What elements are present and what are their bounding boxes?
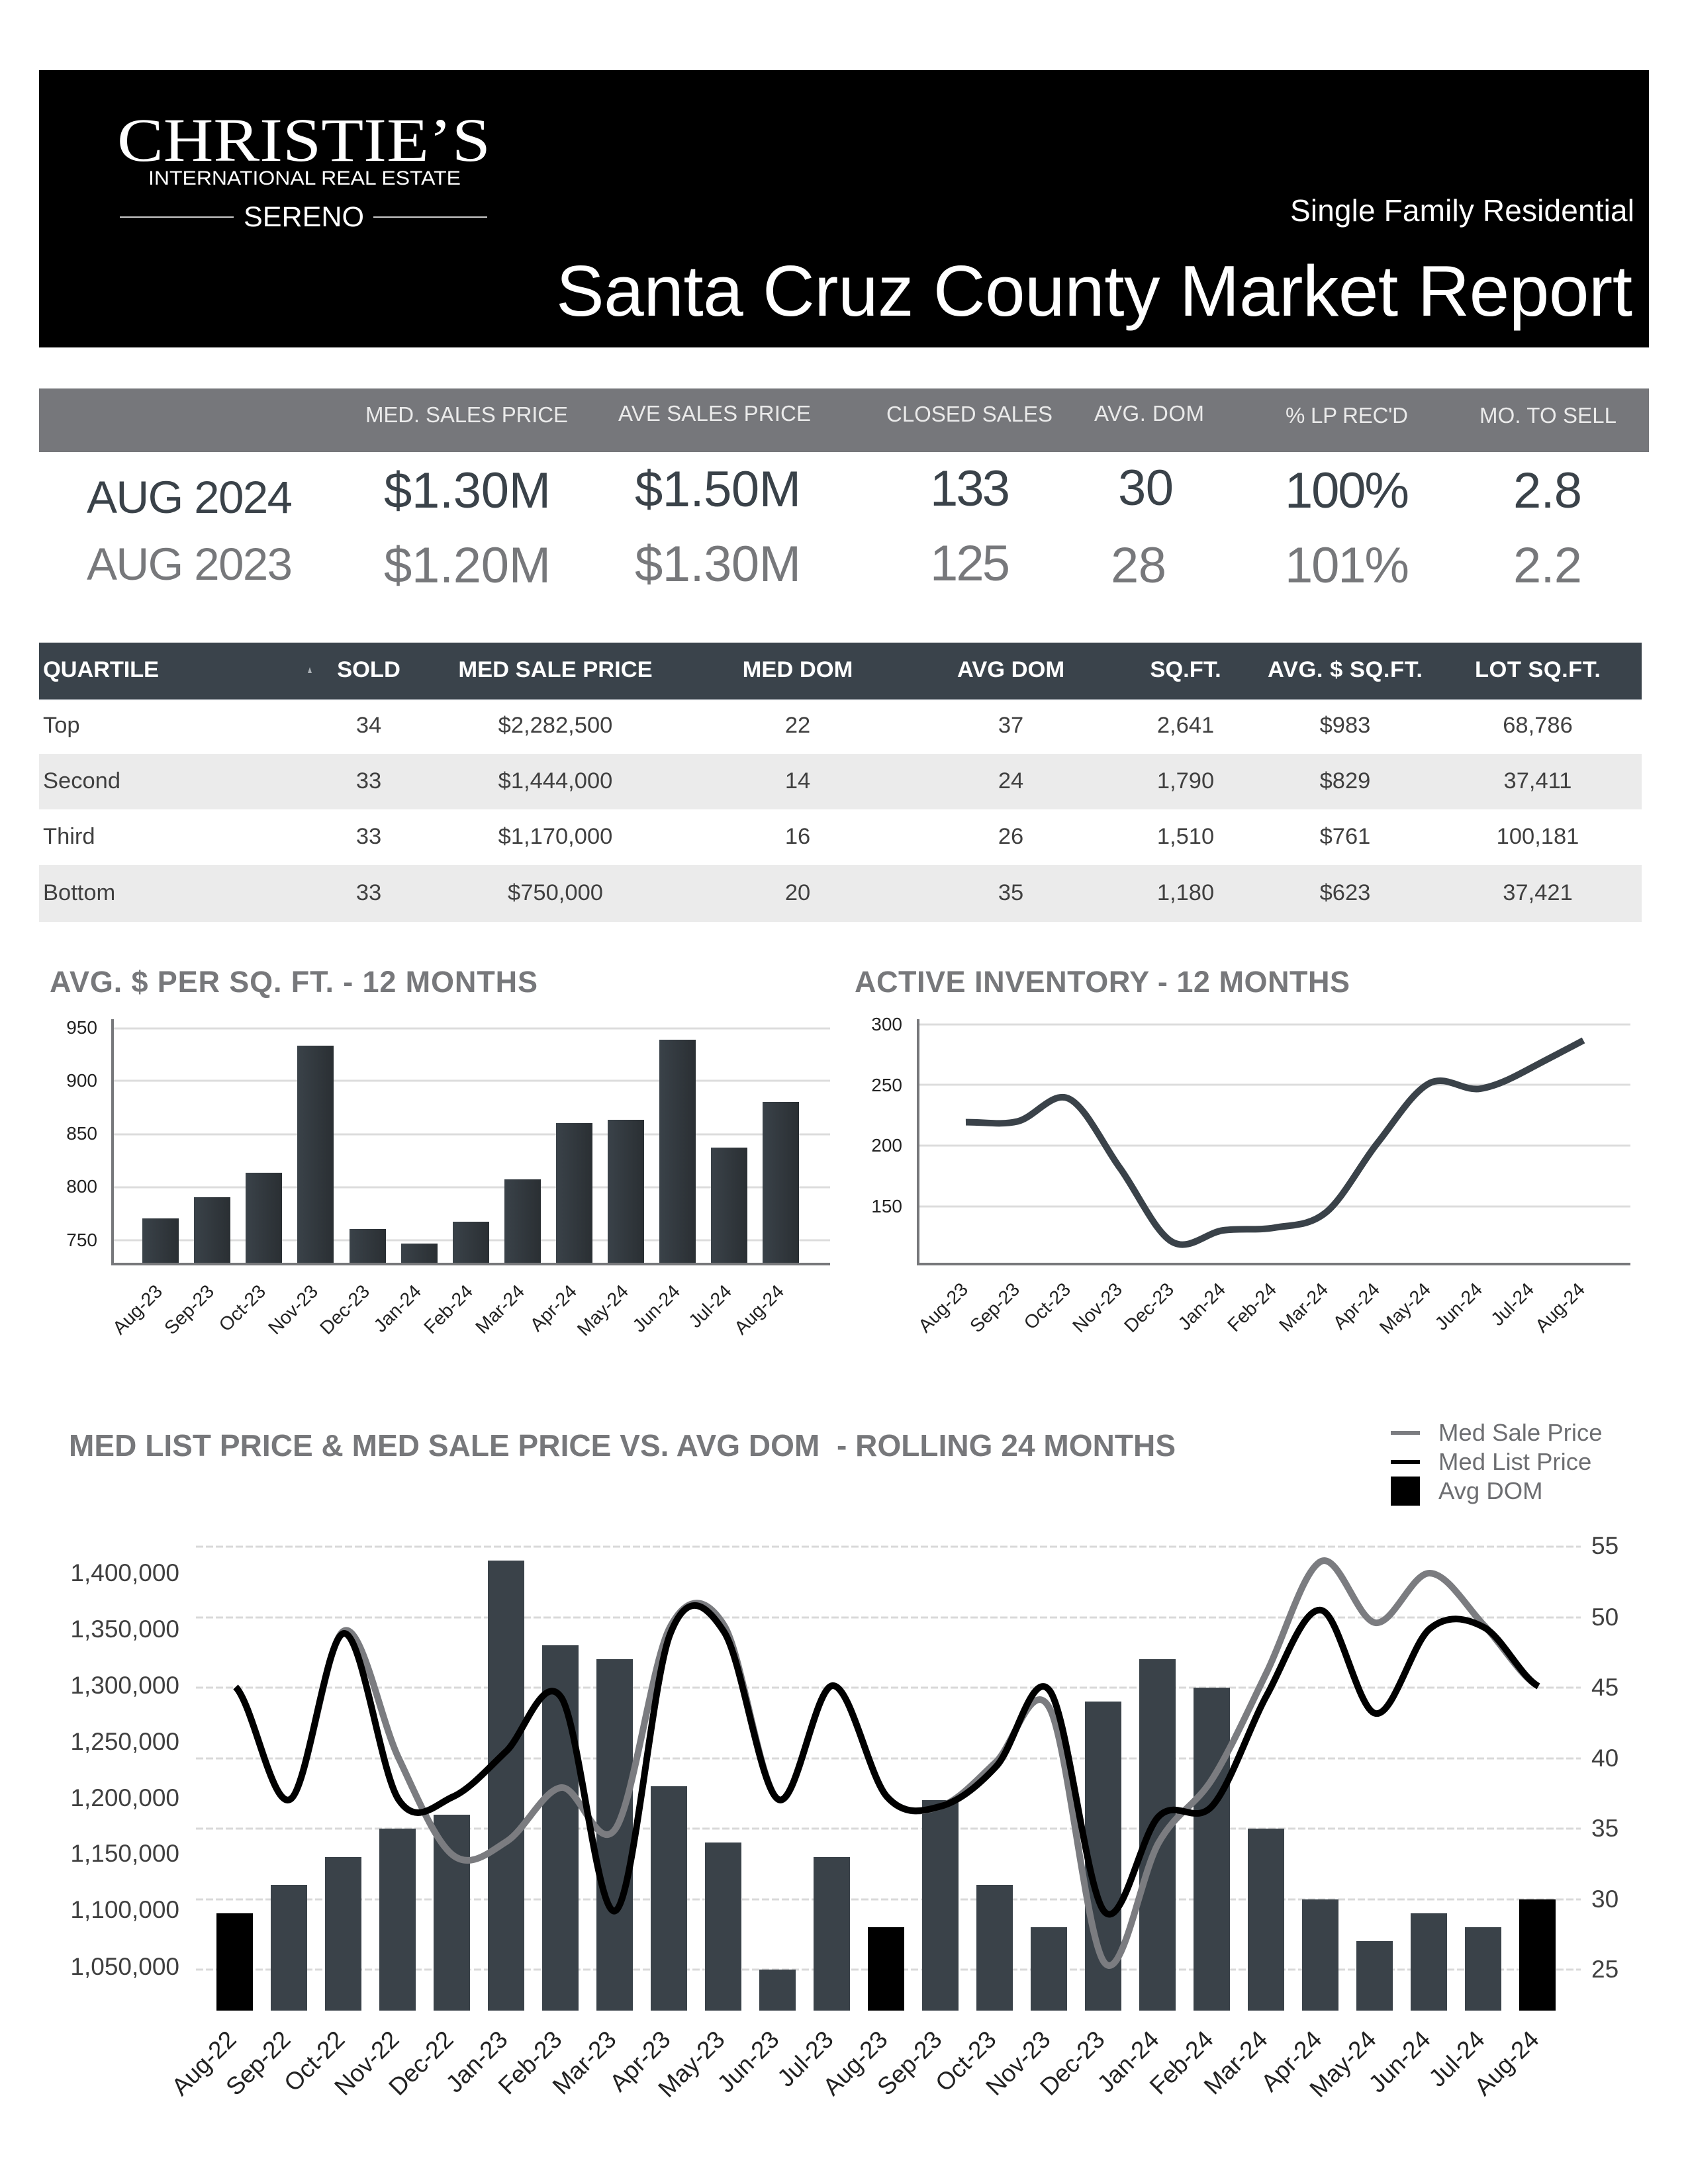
logo: Christie's International Real Estate Sereno: INTERNATIONAL REAL ESTATE: [148, 167, 461, 189]
left axis labels: [70, 1559, 179, 1980]
right axis labels: 35: [1591, 1815, 1618, 1842]
y axis labels: 750: [66, 1230, 97, 1250]
x axis labels: Oct-23: [1020, 1279, 1075, 1334]
table header: AVG. $ SQ.FT.: [1268, 657, 1423, 682]
right axis labels: 30: [1591, 1886, 1618, 1913]
metrics row: Aug 2024: 2.8: [1513, 463, 1582, 519]
x axis labels: Feb-23: [493, 2026, 567, 2100]
table row: Second: 14: [785, 768, 810, 794]
right axis labels: 40: [1591, 1745, 1618, 1772]
left axis labels: 1,300,000: [70, 1672, 179, 1699]
table row: Third: Third: [43, 824, 95, 849]
metrics row: Aug 2024: [87, 460, 1582, 523]
left axis labels: 1,200,000: [70, 1784, 179, 1811]
metrics row: Aug 2023: 125: [930, 535, 1010, 592]
table row: Second: 1,790: [1157, 768, 1214, 794]
chart heading: MED LIST PRICE & MED SALE PRICE VS. AVG DOM - ROLLING 24 MONTHS: [69, 1428, 1176, 1463]
metrics row: Aug 2023: AUG 2023: [87, 539, 293, 590]
right axis labels: 25: [1591, 1956, 1618, 1983]
x axis labels: Apr-24: [1329, 1279, 1384, 1334]
table row: Second: Second: [43, 768, 120, 794]
x axis labels: Feb-24: [1223, 1279, 1281, 1336]
x axis labels: Feb-24: [1145, 2026, 1219, 2100]
table row: Bottom: 1,180: [1157, 880, 1214, 905]
table row: Top: $983: [1320, 713, 1370, 738]
x axis labels: Feb-24: [420, 1281, 477, 1338]
metrics row: Aug 2024: $1.50M: [635, 461, 801, 518]
table row: Third: $1,170,000: [498, 824, 612, 849]
x axis labels: Sep-23: [966, 1279, 1024, 1337]
table header: [39, 643, 1642, 700]
x axis labels: Nov-23: [264, 1281, 322, 1339]
x axis labels: Mar-24: [1275, 1279, 1333, 1336]
metrics row: Aug 2023: $1.30M: [635, 536, 801, 592]
y axis labels: 900: [66, 1070, 97, 1091]
table row: Third: [43, 824, 1579, 849]
x axis labels: [109, 1281, 788, 1340]
table row: Second: 37,411: [1504, 768, 1571, 794]
metrics row: Aug 2023: $1.20M: [384, 537, 551, 594]
panel: list price, sale price and DOM combo chart: [69, 1419, 1618, 2103]
table row: Top: 34: [356, 713, 381, 738]
x axis labels: Aug-23: [818, 2026, 893, 2101]
table row: Third: 33: [356, 824, 381, 849]
chart heading: AVG. $ PER SQ. FT. - 12 MONTHS: [50, 965, 538, 999]
panel: key metrics: [39, 388, 1649, 594]
metrics header band: % LP REC'D: [1286, 403, 1408, 428]
x axis labels: Apr-24: [1256, 2026, 1327, 2097]
x axis labels: Dec-23: [316, 1281, 374, 1339]
panel: active inventory line chart: [855, 965, 1630, 1338]
x axis labels: Aug-24: [730, 1281, 788, 1339]
x axis labels: Oct-23: [215, 1281, 270, 1336]
right axis labels: [1591, 1532, 1618, 1983]
x axis labels: Dec-22: [383, 2026, 459, 2101]
y axis labels: 150: [871, 1196, 902, 1216]
subtitle: Single Family Residential: [1290, 193, 1634, 228]
metrics row: Aug 2023: 2.2: [1513, 537, 1582, 594]
metrics header band: AVE SALES PRICE: [618, 401, 811, 426]
table row: Third: 26: [998, 824, 1023, 849]
legend: Avg DOM: [1438, 1477, 1543, 1504]
bars: [142, 1040, 799, 1263]
table row: Third: 1,510: [1157, 824, 1214, 849]
med list price line: [236, 1606, 1538, 1915]
x axis labels: Jan-24: [370, 1281, 426, 1337]
metrics header band: AVG. DOM: [1094, 401, 1204, 426]
table row: Bottom: 33: [356, 880, 381, 905]
x axis labels: Jun-24: [629, 1281, 684, 1337]
table row: Top: 2,641: [1157, 713, 1214, 738]
x axis labels: Jan-24: [1092, 2026, 1164, 2098]
chart heading: ACTIVE INVENTORY - 12 MONTHS: [855, 965, 1350, 999]
right axis labels: 55: [1591, 1532, 1618, 1559]
table header: SOLD: [337, 657, 400, 682]
table row: Bottom: $623: [1320, 880, 1370, 905]
DOM bars: [216, 1561, 1556, 2011]
legend: Med List Price: [1438, 1448, 1591, 1475]
x axis labels: Jun-24: [1431, 1279, 1487, 1335]
table row: Second: 33: [356, 768, 381, 794]
metrics row: Aug 2023: 28: [1111, 537, 1166, 594]
table row: Top: 37: [998, 713, 1023, 738]
x axis labels: May-24: [1376, 1279, 1435, 1338]
metrics header band: [39, 388, 1649, 452]
x axis labels: [914, 1279, 1589, 1338]
table header: QUARTILE: [43, 657, 159, 682]
logo: Christie's International Real Estate Sereno: CHRISTIE’S: [117, 107, 491, 175]
left axis labels: 1,150,000: [70, 1840, 179, 1867]
panel: avg $ per sq ft bar chart: [50, 965, 830, 1340]
y axis labels: 950: [66, 1017, 97, 1038]
right axis labels: 50: [1591, 1604, 1618, 1631]
metrics row: Aug 2024: 133: [930, 461, 1010, 517]
logo: Christie's International Real Estate Sereno: [117, 107, 491, 233]
x axis labels: Aug-24: [1531, 1279, 1589, 1337]
y axis labels: 250: [871, 1075, 902, 1095]
table row: Bottom: 20: [785, 880, 810, 905]
table header: SQ.FT.: [1150, 657, 1221, 682]
table row: Second: $1,444,000: [498, 768, 612, 794]
x axis labels: Jul-24: [1487, 1279, 1538, 1330]
table row: Second: 24: [998, 768, 1023, 794]
x axis labels: Jun-23: [712, 2026, 784, 2098]
x axis labels: Mar-23: [547, 2026, 622, 2100]
panel: quartile table: [39, 643, 1642, 922]
x axis labels: May-23: [653, 2026, 730, 2103]
table row: Bottom: $750,000: [508, 880, 603, 905]
y axis labels: 850: [66, 1123, 97, 1144]
legend: [1391, 1419, 1602, 1506]
table row: Second: $829: [1320, 768, 1370, 794]
x axis labels: Apr-23: [604, 2026, 676, 2097]
report title: Santa Cruz County Market Report: [556, 251, 1632, 332]
table row: Top: [43, 713, 1573, 738]
header banner: [39, 70, 1649, 347]
metrics row: Aug 2024: 100%: [1285, 463, 1409, 519]
table row: Bottom: Bottom: [43, 880, 115, 905]
left axis labels: 1,400,000: [70, 1559, 179, 1586]
x axis labels: Jul-24: [684, 1281, 736, 1332]
left axis labels: 1,100,000: [70, 1896, 179, 1923]
x axis labels: Sep-22: [220, 2026, 296, 2101]
x axis labels: May-24: [573, 1281, 633, 1340]
x axis labels: Aug-23: [914, 1279, 972, 1337]
metrics row: Aug 2024: $1.30M: [384, 463, 551, 519]
x axis labels: Nov-23: [1068, 1279, 1127, 1337]
y axis labels: 300: [871, 1014, 902, 1034]
x axis labels: Mar-24: [1199, 2026, 1273, 2100]
y axis labels: [871, 1014, 902, 1216]
table header: MED DOM: [743, 657, 853, 682]
med sale price line: [236, 1561, 1538, 1966]
table header: AVG DOM: [957, 657, 1064, 682]
table row: Top: 68,786: [1503, 713, 1573, 738]
inventory line: [966, 1040, 1583, 1245]
table row: Third: $761: [1320, 824, 1370, 849]
x axis labels: Aug-22: [166, 2026, 242, 2101]
x axis labels: Aug-24: [1469, 2026, 1544, 2101]
x axis labels: [166, 2026, 1544, 2103]
x axis labels: Dec-23: [1120, 1279, 1178, 1337]
x axis labels: Jul-24: [1423, 2026, 1490, 2092]
metrics row: Aug 2024: 30: [1118, 460, 1174, 516]
metrics header band: CLOSED SALES: [886, 402, 1053, 426]
metrics header band: MED. SALES PRICE: [365, 402, 568, 427]
y axis labels: 200: [871, 1135, 902, 1156]
table row: Third: 16: [785, 824, 810, 849]
table row: Third: 100,181: [1497, 824, 1579, 849]
table row: Top: Top: [43, 713, 80, 738]
x axis labels: Jan-24: [1174, 1279, 1230, 1335]
x axis labels: Oct-22: [279, 2026, 350, 2097]
x axis labels: Aug-23: [109, 1281, 167, 1339]
x axis labels: Apr-24: [526, 1281, 581, 1336]
metrics row: Aug 2023: [87, 535, 1582, 594]
table row: Bottom: 35: [998, 880, 1023, 905]
y axis labels: [66, 1017, 97, 1250]
x axis labels: Nov-22: [329, 2026, 404, 2101]
table header: MED SALE PRICE: [458, 657, 653, 682]
y axis labels: 800: [66, 1176, 97, 1197]
logo: Christie's International Real Estate Sereno: SERENO: [244, 201, 364, 233]
metrics row: Aug 2024: AUG 2024: [87, 472, 293, 523]
x axis labels: May-24: [1304, 2026, 1382, 2103]
table row: Top: $2,282,500: [498, 713, 612, 738]
left axis labels: 1,050,000: [70, 1953, 179, 1980]
table row: Top: 22: [785, 713, 810, 738]
x axis labels: Nov-23: [980, 2026, 1056, 2101]
right axis labels: 45: [1591, 1674, 1618, 1701]
x axis labels: Sep-23: [872, 2026, 947, 2101]
x axis labels: Jul-23: [772, 2026, 839, 2092]
x axis labels: Mar-24: [471, 1281, 529, 1338]
metrics header band: MO. TO SELL: [1479, 403, 1617, 428]
table row: Bottom: [39, 865, 1642, 922]
left axis labels: 1,250,000: [70, 1728, 179, 1755]
table header: LOT SQ.FT.: [1475, 657, 1601, 682]
x axis labels: Jun-24: [1364, 2026, 1436, 2098]
metrics row: Aug 2023: 101%: [1285, 537, 1409, 594]
table row: Second: [39, 754, 1642, 809]
x axis labels: Jan-23: [441, 2026, 513, 2098]
x axis labels: Dec-23: [1035, 2026, 1110, 2101]
x axis labels: Sep-23: [160, 1281, 218, 1339]
legend: Med Sale Price: [1438, 1419, 1602, 1446]
x axis labels: Oct-23: [930, 2026, 1002, 2097]
left axis labels: 1,350,000: [70, 1615, 179, 1643]
table row: Bottom: 37,421: [1503, 880, 1573, 905]
